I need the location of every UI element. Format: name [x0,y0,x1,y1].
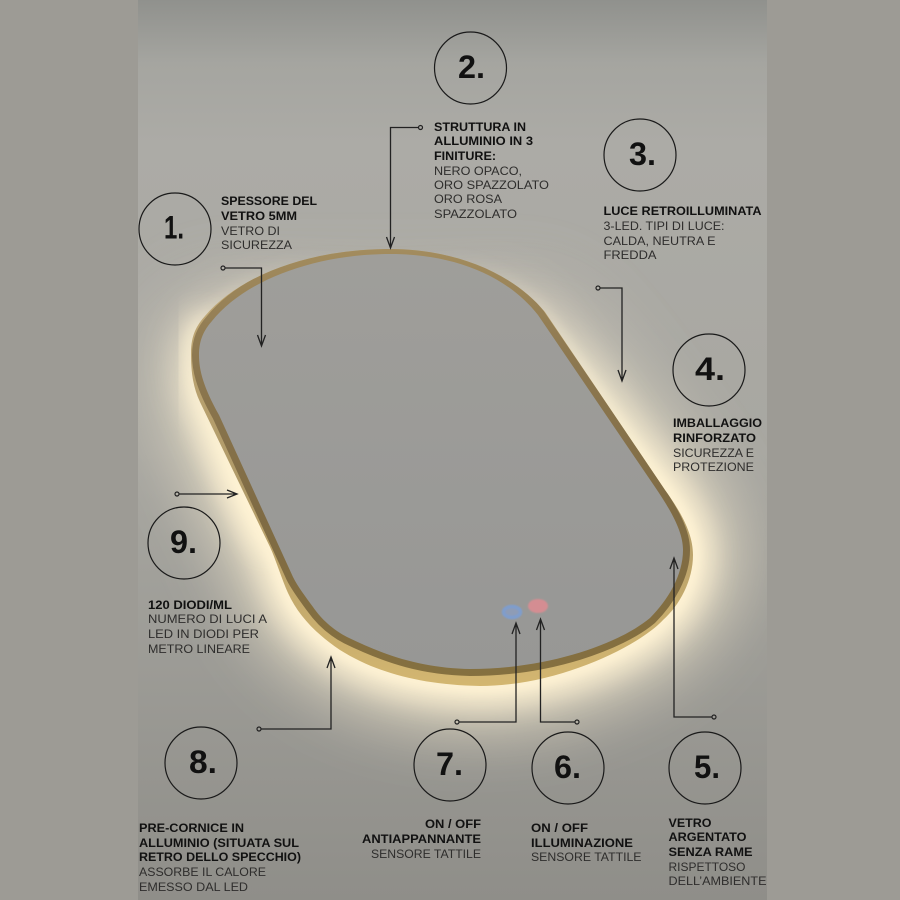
frame [191,249,693,686]
callout 5 [668,558,766,888]
badge 3 [604,119,676,191]
text 6: ON / OFF [531,821,588,835]
badge 5: 5. [694,749,720,785]
text 1: VETRO DI [221,224,280,238]
text 2: ORO ROSA [434,192,502,206]
text 1: VETRO 5MM [221,209,297,223]
badge 9 [148,507,220,579]
text 3: LUCE RETROILLUMINATA [604,204,762,218]
text 8 [139,821,301,894]
text 6: SENSORE TATTILE [531,850,642,864]
callout 3 [596,119,762,381]
text 7: ON / OFF [425,817,481,831]
text 2 [434,120,549,221]
arrow 6 [536,619,579,724]
sensor red [528,599,548,613]
mirror [191,249,693,686]
text 6 [531,821,642,864]
text 3 [604,204,762,262]
text 2: SPAZZOLATO [434,207,517,221]
text 5: VETRO [668,816,712,830]
text 7: ANTIAPPANNANTE [362,832,481,846]
badge 6 [532,732,604,804]
callout 1 [139,193,317,346]
text 7: SENSORE TATTILE [371,847,481,861]
badge 3: 3. [629,136,656,172]
text 2: ORO SPAZZOLATO [434,178,549,192]
callout 2 [386,32,549,248]
text 2: FINITURE: [434,149,496,163]
badge 4: 4. [695,351,725,387]
frame inner band [199,254,683,669]
text 9: NUMERO DI LUCI A [148,612,267,626]
arrow 2 [386,126,422,248]
arrow 7 [455,623,520,724]
badge 9: 9. [170,524,197,560]
callout 6 [531,619,642,864]
badge 2 [434,32,506,104]
glass [199,254,683,669]
badge 1 [139,193,211,265]
text 8: RETRO DELLO SPECCHIO) [139,850,301,864]
callout 9 [148,490,267,656]
text 3: FREDDA [604,248,656,262]
text 5 [668,816,766,888]
light glow [191,249,693,686]
badge 1: 1. [164,210,184,246]
text 4: SICUREZZA E [673,446,754,460]
text 9 [148,598,267,656]
badge 5 [669,732,741,804]
badge 7 [414,729,486,801]
text 8: EMESSO DAL LED [139,880,248,894]
text 8: PRE-CORNICE IN [139,821,244,835]
badge 6: 6. [554,749,581,785]
text 5: ARGENTATO [668,830,746,844]
text 6: ILLUMINAZIONE [531,836,633,850]
text 9: LED IN DIODI PER [148,627,259,641]
text 1: SICUREZZA [221,238,292,252]
text 1: SPESSORE DEL [221,194,317,208]
text 7 [362,817,481,861]
text 4: IMBALLAGGIO [673,416,762,430]
callout 4 [673,334,762,474]
text 9: METRO LINEARE [148,642,250,656]
text 5: DELL’AMBIENTE [668,874,766,888]
text 3: CALDA, NEUTRA E [604,234,716,248]
sensor blue [504,606,520,618]
text 4: RINFORZATO [673,431,756,445]
text 2: ALLUMINIO IN 3 [434,134,533,148]
badge 8 [165,727,237,799]
arrow 8 [257,657,335,731]
arrow 9 [175,490,237,498]
text 5: RISPETTOSO [668,860,746,874]
text 4 [673,416,762,474]
arrow 1 [221,266,266,346]
text 2: STRUTTURA IN [434,120,526,134]
text 9: 120 DIODI/ML [148,598,232,612]
text 8: ALLUMINIO (SITUATA SUL [139,836,299,850]
callout 8 [139,657,335,894]
text 2: NERO OPACO, [434,164,522,178]
text 5: SENZA RAME [668,845,752,859]
text 4: PROTEZIONE [673,460,754,474]
badge 8: 8. [189,744,217,780]
text 1 [221,194,317,252]
callout 7 [362,623,520,861]
arrow 5 [670,558,716,719]
text 3: 3-LED. TIPI DI LUCE: [604,219,724,233]
badge 2: 2. [458,49,485,85]
badge 7: 7. [436,746,463,782]
text 8: ASSORBE IL CALORE [139,865,266,879]
arrow 3 [596,286,626,381]
